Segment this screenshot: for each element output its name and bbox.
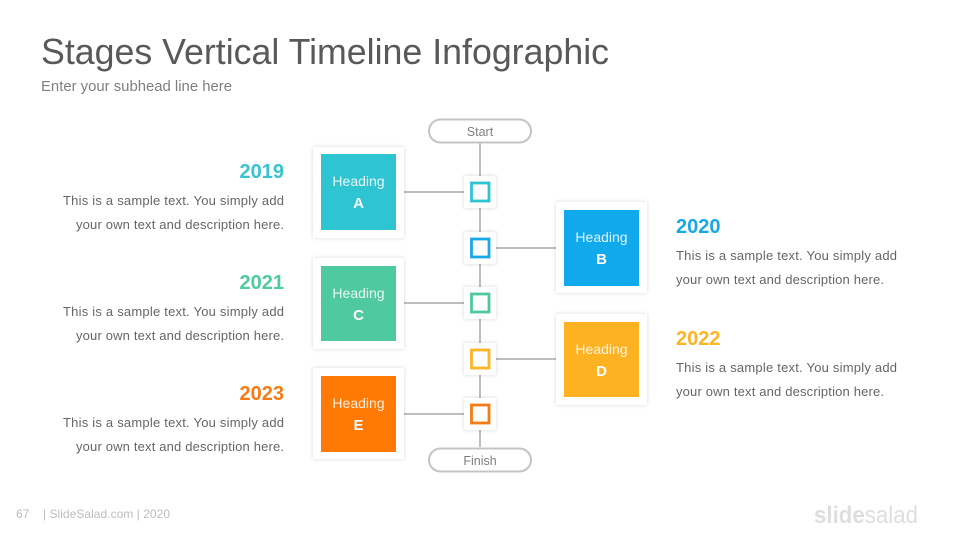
text block: 2019: your own text and description here. (76, 217, 284, 232)
footer: page number and credit: 67 (16, 507, 30, 521)
text block: 2019: This is a sample text. You simply add (63, 193, 284, 208)
card: heading B: B (596, 251, 607, 268)
node 3 (464, 287, 496, 319)
card: heading D: D (596, 363, 607, 380)
text block: 2020: This is a sample text. You simply add (676, 248, 897, 263)
footer: page number and credit: | SlideSalad.com | 2020 (43, 507, 170, 521)
card: heading C: C (353, 307, 364, 324)
card: heading E: E (353, 417, 364, 434)
text block: 2023: This is a sample text. You simply add (63, 415, 284, 430)
text block: 2023: 2023 (240, 383, 284, 405)
text block: 2022: 2022 (676, 328, 720, 350)
node 5 (464, 398, 496, 430)
text block: 2019 (63, 161, 284, 232)
card: heading C (313, 258, 404, 349)
text block: 2019: 2019 (240, 161, 284, 183)
start pill (429, 120, 531, 142)
text block: 2023: your own text and description here. (76, 439, 284, 454)
card: heading D: Heading (575, 341, 628, 357)
text block: 2022 (676, 328, 897, 399)
title: Stages Vertical Timeline Infographic (41, 31, 609, 72)
text block: 2021 (63, 272, 284, 343)
text block: 2020: your own text and description here. (676, 272, 884, 287)
finish pill (429, 448, 531, 472)
finish pill: Finish (463, 454, 497, 468)
node 1 (464, 176, 496, 208)
text block: 2022: your own text and description here. (676, 384, 884, 399)
text block: 2021: your own text and description here. (76, 328, 284, 343)
subhead: Enter your subhead line here (41, 78, 232, 95)
card: heading A: A (353, 195, 364, 212)
card: heading C: Heading (332, 285, 385, 301)
card: heading A: Heading (332, 173, 385, 189)
text block: 2023 (63, 383, 284, 454)
timeline connector lines (404, 142, 556, 447)
card: heading E (313, 368, 404, 459)
node 4 (464, 343, 496, 375)
logo wordmark: slidesalad (814, 502, 918, 529)
text block: 2021: This is a sample text. You simply add (63, 304, 284, 319)
text block: 2020: 2020 (676, 216, 720, 238)
card: heading B: Heading (575, 229, 628, 245)
start pill: Start (467, 125, 494, 139)
text block: 2020 (676, 216, 897, 287)
text block: 2021: 2021 (240, 272, 284, 294)
node 2 (464, 232, 496, 264)
card: heading A (313, 147, 404, 238)
text block: 2022: This is a sample text. You simply add (676, 360, 897, 375)
card: heading D (556, 314, 647, 405)
card: heading B (556, 202, 647, 293)
card: heading E: Heading (332, 395, 385, 411)
